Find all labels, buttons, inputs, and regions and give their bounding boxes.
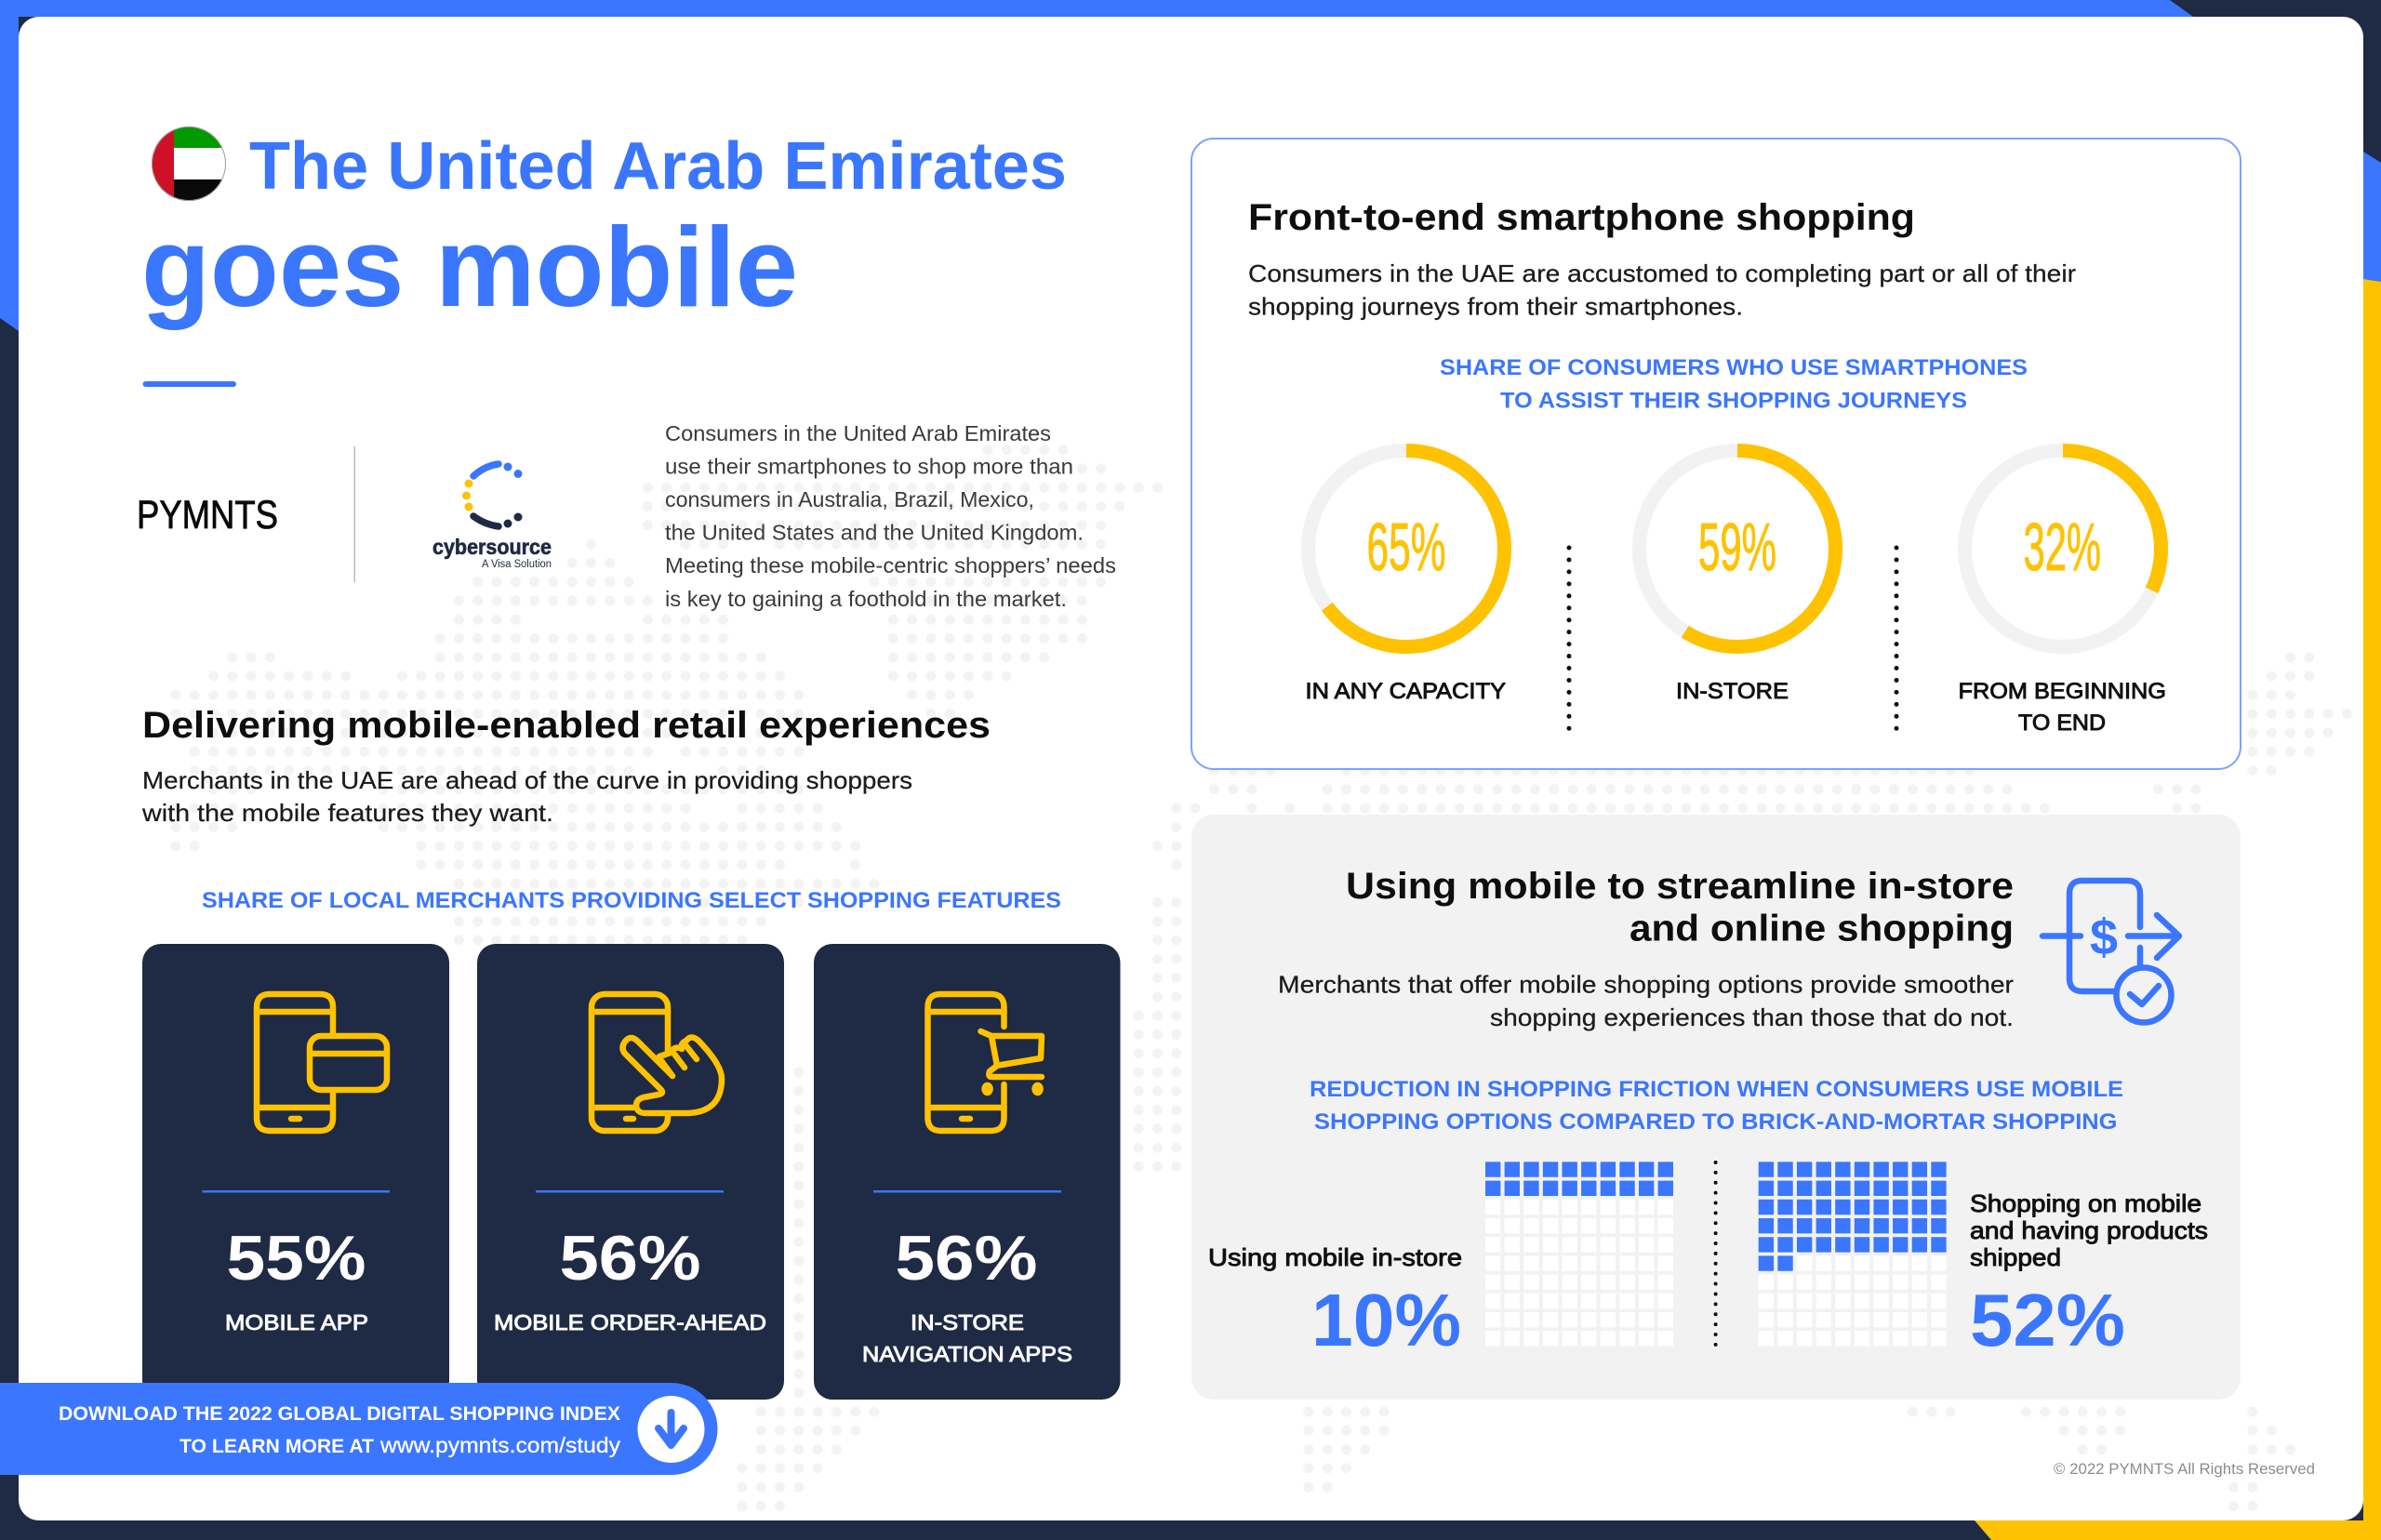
stat: shopping on mobile 52%: shipped [1970,1243,2061,1271]
download banner: www.pymnts.com/study [379,1433,621,1457]
description [1278,971,2014,1031]
heading: Using mobile to streamline in-store [1346,866,2014,907]
intro paragraph: consumers in Australia, Brazil, Mexico, [665,487,1034,511]
heading: and online shopping [1629,908,2014,949]
title line 2: goes mobile [141,204,798,330]
donut: in-store 59%: IN-STORE [1676,679,1789,704]
chart title: SHARE OF CONSUMERS WHO USE SMARTPHONES [1440,355,2028,380]
title line 1: The United Arab Emirates [249,129,1067,204]
title block [141,126,1067,330]
intro paragraph: use their smartphones to shop more than [665,454,1073,478]
download banner [0,1383,718,1475]
panel: mobile app card [142,944,449,1400]
panel: mobile order-ahead card [477,944,784,1400]
label: mobile order-ahead: MOBILE ORDER-AHEAD [494,1310,766,1334]
donut: from beginning to end 32%: FROM BEGINNING [1959,679,2166,704]
copyright footer: © 2022 PYMNTS All Rights Reserved [2054,1460,2315,1478]
stat: 56%: 56% [895,1223,1038,1294]
label: in-store navigation apps: NAVIGATION APPS [862,1342,1072,1366]
stat: 55%: 55% [227,1223,366,1294]
chart title [1310,1077,2123,1135]
donut: from beginning to end 32% [1959,450,2166,736]
chart title [1440,355,2028,413]
PYMNTS logo: PYMNTS [137,493,278,538]
intro paragraph: Consumers in the United Arab Emirates [665,421,1051,445]
chart title: SHOPPING OPTIONS COMPARED TO BRICK-AND-MORTAR SHOPPING [1314,1109,2117,1135]
donut: from beginning to end 32%: TO END [2018,710,2106,736]
intro paragraph: the United States and the United Kingdom. [665,521,1084,545]
download banner: TO LEARN MORE AT [180,1435,374,1457]
chart title: TO ASSIST THEIR SHOPPING JOURNEYS [1500,389,1967,413]
donut: in-store 59%: 59% [1698,511,1776,585]
description [1248,259,2076,320]
section text: retail experiences [141,766,912,827]
stat: using mobile in-store 10%: 10% [1311,1279,1461,1361]
icon: UAE flag [152,126,226,201]
intro paragraph: Meeting these mobile-centric shoppers’ needs [665,553,1116,578]
donut: in-store 59% [1639,450,1836,704]
panel: in-store navigation card [814,944,1120,1400]
description: Merchants that offer mobile shopping options provide smoother [1278,971,2014,999]
donut: in any capacity 65% [1306,450,1506,704]
icon: phone with shopping cart [928,994,1042,1131]
label: in-store navigation apps: IN-STORE [911,1310,1024,1334]
stat: using mobile in-store 10%: Using mobile in-store [1208,1243,1462,1271]
stat: shopping on mobile 52%: and having products [1970,1216,2208,1244]
section heading: retail experiences: Delivering mobile-enabled retail experiences [142,705,991,746]
Cybersource logo [432,463,552,570]
waffle chart: 52% [1759,1170,1947,1338]
intro paragraph: is key to gaining a foothold in the market. [665,587,1067,611]
donut: in any capacity 65%: 65% [1367,511,1445,585]
divider dots [1894,548,1899,731]
icon: phone with dollar and check: $ [2090,909,2118,965]
divider dots [1566,548,1572,731]
chart title: REDUCTION IN SHOPPING FRICTION WHEN CONSUMERS USE MOBILE [1310,1077,2123,1102]
divider dots [1714,1162,1718,1346]
stat: shopping on mobile 52% [1970,1189,2208,1361]
title rule [143,381,236,387]
donut: from beginning to end 32%: 32% [2024,511,2101,585]
stat: 56%: 56% [560,1223,701,1294]
Cybersource logo: A Visa Solution [482,559,552,570]
icon: download arrow [638,1396,705,1463]
icon: phone with payment card [257,994,387,1131]
intro paragraph [665,421,1116,611]
label: mobile app: MOBILE APP [225,1310,368,1334]
waffle chart: 10% [1485,1170,1673,1338]
label: in-store navigation apps [862,1310,1072,1366]
Cybersource logo: cybersource [432,535,552,559]
panel: using mobile to streamline shopping [1191,815,2241,1400]
heading: Front-to-end smartphone shopping [1248,197,1915,238]
stat: shopping on mobile 52%: 52% [1970,1279,2125,1361]
description: Consumers in the UAE are accustomed to completing part or all of their [1248,259,2076,287]
stat: using mobile in-store 10% [1208,1243,1462,1361]
stat: shopping on mobile 52%: Shopping on mobile [1970,1189,2201,1217]
download banner: DOWNLOAD THE 2022 GLOBAL DIGITAL SHOPPING INDEX [59,1402,621,1425]
icon: phone with pointing hand [592,994,722,1131]
section text: retail experiences: with the mobile features they want. [141,799,553,827]
dotted world map background [166,441,2357,1516]
heading [1346,866,2014,949]
description: shopping journeys from their smartphones. [1248,292,1743,320]
icon: phone with dollar and check [2042,881,2179,1023]
section text: retail experiences: Merchants in the UAE are ahead of the curve in providing shoppers [142,766,912,794]
panel: front-to-end smartphone shopping [1191,139,2241,769]
donut: in any capacity 65%: IN ANY CAPACITY [1306,679,1506,704]
chart title: merchant features: SHARE OF LOCAL MERCHANTS PROVIDING SELECT SHOPPING FEATURES [202,888,1061,913]
description: shopping experiences than those that do not. [1490,1003,2014,1031]
